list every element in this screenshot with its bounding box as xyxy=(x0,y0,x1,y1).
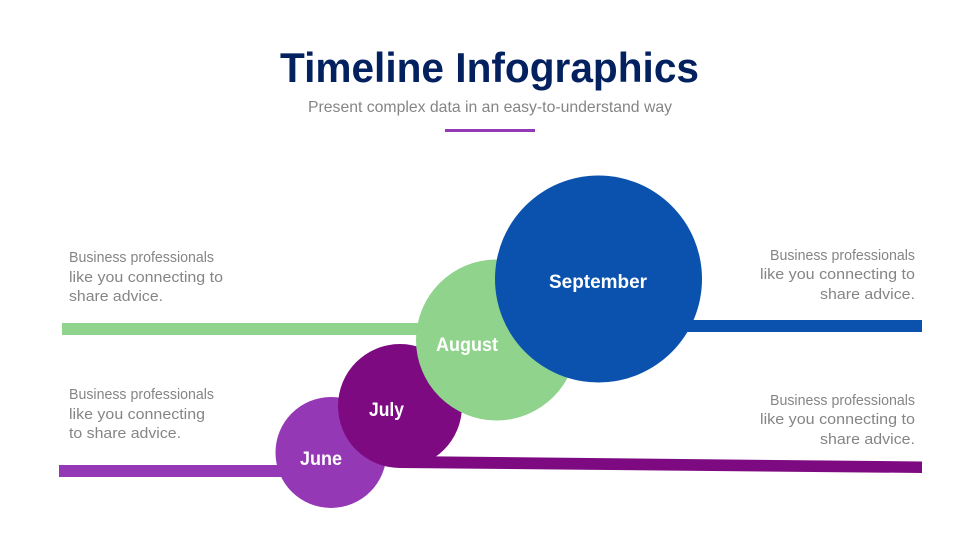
text block: top left: like you connecting to xyxy=(69,269,223,286)
line: July xyxy=(400,456,922,473)
line: September xyxy=(680,320,922,332)
text block: bottom right: share advice. xyxy=(820,431,915,448)
text block: bottom left xyxy=(69,386,214,442)
text block: top left: share advice. xyxy=(69,288,163,305)
line: June xyxy=(59,465,284,477)
text block: bottom left: to share advice. xyxy=(69,425,181,442)
text block: bottom right: Business professionals xyxy=(770,392,915,409)
circle: September xyxy=(495,176,702,382)
text block: top right xyxy=(760,247,915,303)
circle: July xyxy=(338,344,462,468)
text block: top right: Business professionals xyxy=(770,247,915,264)
circle: July: July xyxy=(369,400,404,421)
circle: June: June xyxy=(300,449,342,470)
circle: August xyxy=(416,260,577,420)
text block: bottom left: Business professionals xyxy=(69,386,214,403)
subtitle: Present complex data in an easy-to-understand way xyxy=(308,99,672,116)
text block: top left: Business professionals xyxy=(69,249,214,266)
text block: top right: share advice. xyxy=(820,286,915,303)
line: August xyxy=(62,323,422,335)
text block: bottom right: like you connecting to xyxy=(760,411,915,428)
circle: June xyxy=(276,397,386,508)
text block: bottom right xyxy=(760,392,915,448)
title underline xyxy=(445,129,535,132)
text block: top right: like you connecting to xyxy=(760,266,915,283)
text block: bottom left: like you connecting xyxy=(69,406,205,423)
title: Timeline Infographics xyxy=(280,44,699,91)
text block: top left xyxy=(69,249,223,305)
circle: August: August xyxy=(436,335,499,356)
circle: September: September xyxy=(549,272,648,293)
